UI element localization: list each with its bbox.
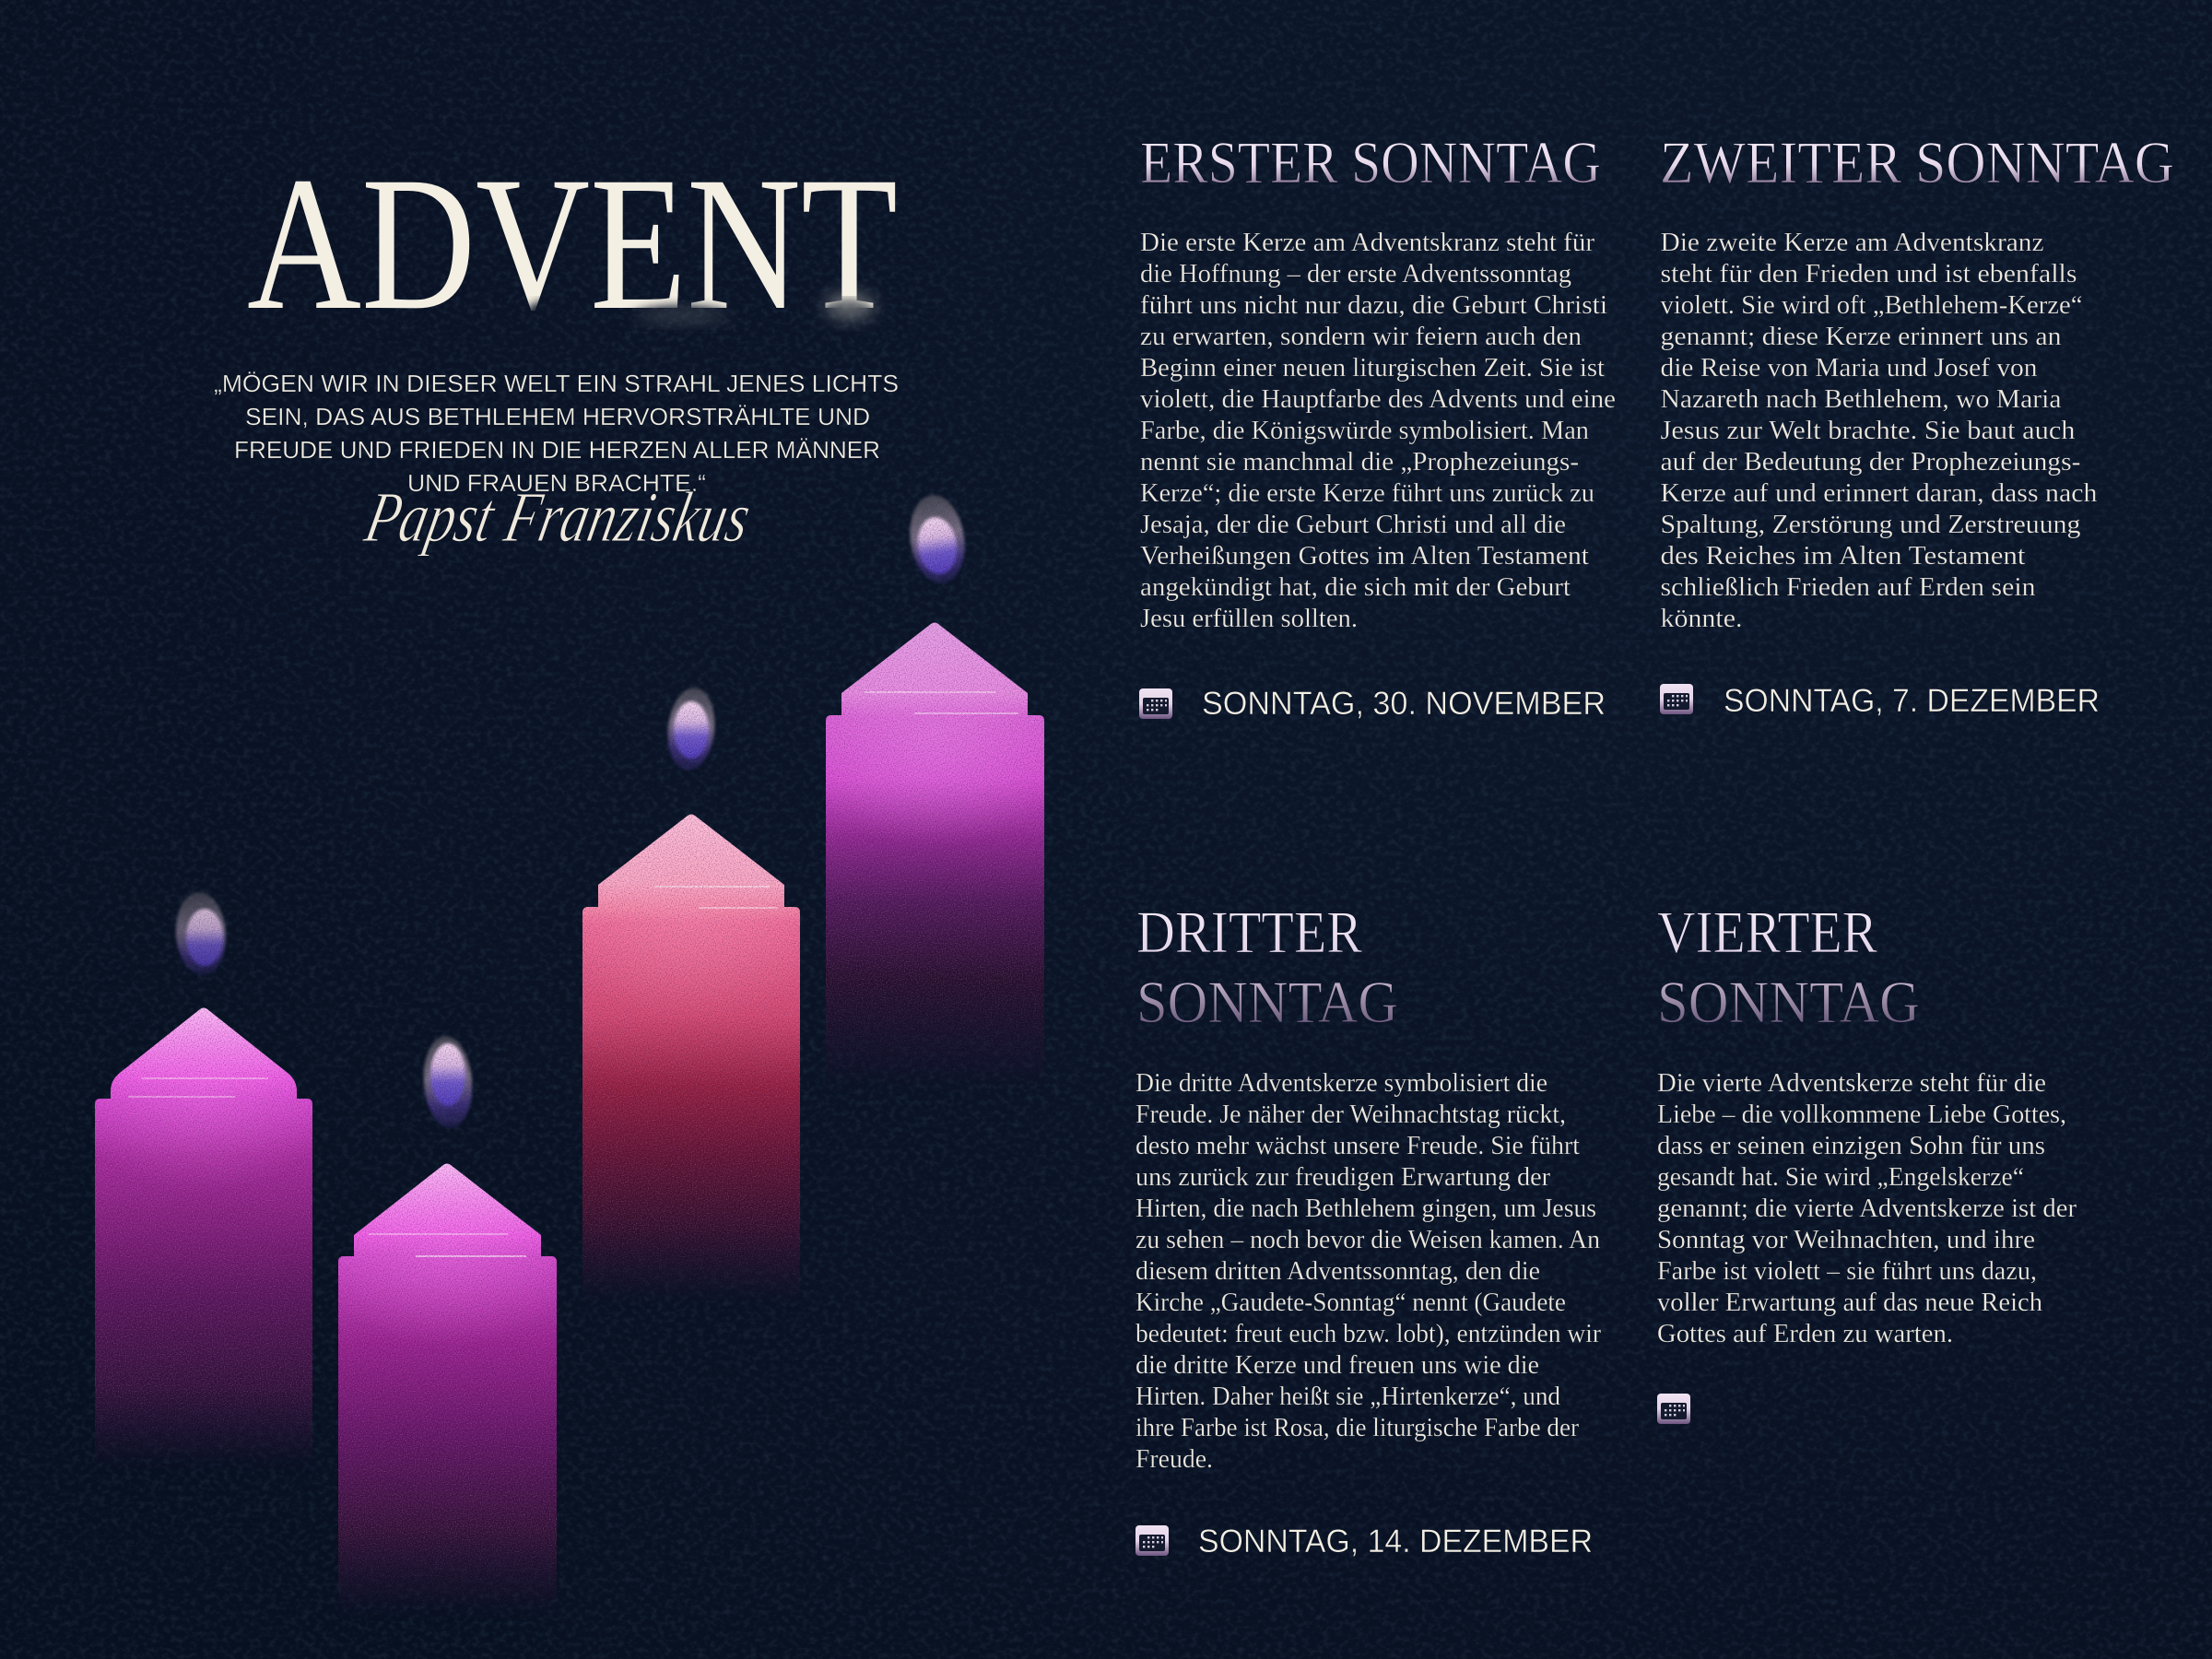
body text: zu sehen – noch bevor die Weisen kamen. An: [1135, 1225, 1600, 1254]
heading: DRITTER: [1136, 900, 1363, 966]
flame candle 4: [905, 491, 970, 587]
heading: ERSTER SONNTAG: [1140, 130, 1601, 196]
body text: die Hoffnung – der erste Adventssonntag: [1140, 259, 1571, 288]
panel: zweiter sonntag: [1660, 130, 2174, 719]
body text: Hirten, die nach Bethlehem gingen, um Jesus: [1135, 1194, 1596, 1223]
panel: erster sonntag: [1139, 130, 1616, 722]
body text: dass er seinen einzigen Sohn für uns: [1657, 1131, 2045, 1160]
quote attribution signature: Papst Franziskus: [358, 478, 758, 558]
candle 2: purple: [338, 1163, 557, 1622]
panel: vierter sonntag: [1657, 900, 2077, 1424]
title: [249, 181, 896, 329]
icon: calendar: [1657, 1394, 1690, 1424]
body text: [1135, 1068, 1601, 1474]
heading: ZWEITER SONNTAG: [1660, 130, 2174, 196]
body text: gesandt hat. Sie wird „Engelskerze“: [1657, 1162, 2024, 1192]
body text: Farbe, die Königswürde symbolisiert. Man: [1140, 416, 1589, 445]
body text: ihre Farbe ist Rosa, die liturgische Farbe der: [1135, 1413, 1579, 1442]
quote: [214, 370, 899, 497]
body text: die dritte Kerze und freuen uns wie die: [1135, 1350, 1539, 1380]
body text: Jesu erfüllen sollten.: [1140, 604, 1358, 633]
icon: calendar: [1139, 688, 1172, 719]
body text: violett. Sie wird oft „Bethlehem-Kerze“: [1661, 290, 2083, 320]
quote: „MÖGEN WIR IN DIESER WELT EIN STRAHL JENES LICHTS: [214, 370, 899, 397]
body text: uns zurück zur freudigen Erwartung der: [1135, 1162, 1550, 1192]
body text: Freude. Je näher der Weihnachtstag rückt,: [1135, 1100, 1566, 1129]
body text: diesem dritten Adventssonntag, den die: [1135, 1256, 1540, 1286]
body text: Jesus zur Welt brachte. Sie baut auch: [1661, 416, 2076, 445]
body text: könnte.: [1661, 604, 1742, 633]
flame candle 1: [173, 890, 229, 977]
body text: [1661, 228, 2098, 633]
panel: dritter sonntag: [1135, 900, 1601, 1559]
body text: Liebe – die vollkommene Liebe Gottes,: [1657, 1100, 2066, 1129]
candle 4: purple: [826, 623, 1044, 1097]
quote: SEIN, DAS AUS BETHLEHEM HERVORSTRÄHLTE UND: [245, 403, 870, 430]
body text: Sonntag vor Weihnachten, und ihre: [1657, 1225, 2035, 1254]
body text: Verheißungen Gottes im Alten Testament: [1140, 541, 1589, 571]
body text: zu erwarten, sondern wir feiern auch den: [1140, 322, 1582, 351]
candle 3: pink: [582, 815, 800, 1309]
heading: [1657, 900, 1920, 1036]
icon: calendar: [1135, 1525, 1169, 1556]
body text: desto mehr wächst unsere Freude. Sie führt: [1135, 1131, 1580, 1160]
body text: die Reise von Maria und Josef von: [1661, 353, 2038, 382]
body text: des Reiches im Alten Testament: [1661, 541, 2026, 571]
body text: Die dritte Adventskerze symbolisiert die: [1135, 1068, 1547, 1098]
body text: violett, die Hauptfarbe des Advents und eine: [1140, 384, 1616, 414]
candle 1: purple: [95, 1008, 312, 1475]
body text: Die vierte Adventskerze steht für die: [1657, 1068, 2046, 1098]
flame candle 3: [664, 686, 719, 772]
date: SONNTAG, 30. NOVEMBER: [1202, 686, 1606, 722]
body text: Gottes auf Erden zu warten.: [1657, 1319, 1953, 1348]
body text: führt uns nicht nur dazu, die Geburt Christi: [1140, 290, 1607, 320]
body text: [1657, 1068, 2077, 1348]
heading: SONNTAG: [1136, 970, 1398, 1036]
title: ADVENT: [247, 137, 898, 349]
body text: Die zweite Kerze am Adventskranz: [1661, 228, 2044, 257]
date: SONNTAG, 7. DEZEMBER: [1724, 683, 2100, 719]
body text: steht für den Frieden und ist ebenfalls: [1661, 259, 2077, 288]
date: SONNTAG, 14. DEZEMBER: [1198, 1524, 1593, 1559]
quote: UND FRAUEN BRACHTE.“: [407, 469, 706, 497]
body text: bedeutet: freut euch bzw. lobt), entzünden wir: [1135, 1319, 1601, 1348]
icon: calendar: [1660, 684, 1693, 714]
body text: Spaltung, Zerstörung und Zerstreuung: [1661, 510, 2081, 539]
body text: schließlich Frieden auf Erden sein: [1661, 572, 2036, 602]
body text: [1140, 228, 1616, 633]
body text: Kirche „Gaudete-Sonntag“ nennt (Gaudete: [1135, 1288, 1566, 1317]
body text: angekündigt hat, die sich mit der Geburt: [1140, 572, 1571, 602]
heading: VIERTER: [1657, 900, 1878, 966]
body text: Kerze auf und erinnert daran, dass nach: [1661, 478, 2098, 508]
body text: Freude.: [1135, 1444, 1213, 1474]
body text: Nazareth nach Bethlehem, wo Maria: [1661, 384, 2062, 414]
body text: Kerze“; die erste Kerze führt uns zurück zu: [1140, 478, 1594, 508]
body text: genannt; diese Kerze erinnert uns an: [1661, 322, 2062, 351]
body text: auf der Bedeutung der Prophezeiungs-: [1661, 447, 2081, 477]
body text: Farbe ist violett – sie führt uns dazu,: [1657, 1256, 2037, 1286]
heading: [1136, 900, 1398, 1036]
body text: Beginn einer neuen liturgischen Zeit. Sie ist: [1140, 353, 1605, 382]
body text: genannt; die vierte Adventskerze ist der: [1657, 1194, 2077, 1223]
heading: SONNTAG: [1657, 970, 1920, 1036]
body text: Hirten. Daher heißt sie „Hirtenkerze“, und: [1135, 1382, 1560, 1411]
body text: voller Erwartung auf das neue Reich: [1657, 1288, 2042, 1317]
flame candle 2: [421, 1034, 475, 1130]
body text: Die erste Kerze am Adventskranz steht für: [1140, 228, 1594, 257]
body text: nennt sie manchmal die „Prophezeiungs-: [1140, 447, 1579, 477]
body text: Jesaja, der die Geburt Christi und all die: [1140, 510, 1566, 539]
quote: FREUDE UND FRIEDEN IN DIE HERZEN ALLER MÄNNER: [234, 436, 880, 464]
